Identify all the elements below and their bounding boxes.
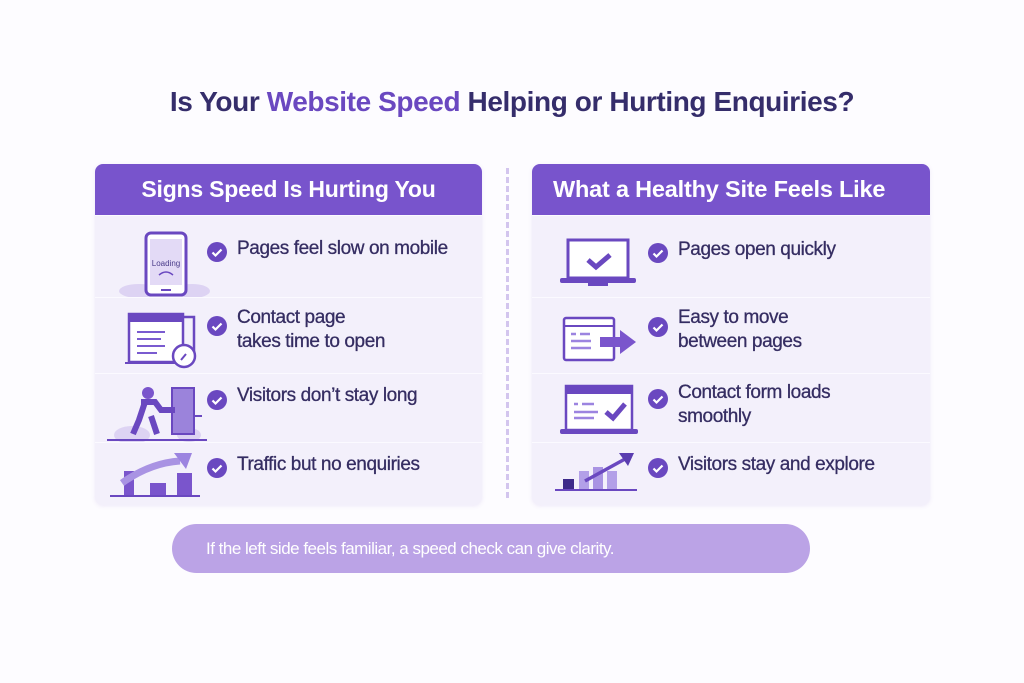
text: takes time to open <box>237 331 385 352</box>
row: easy to move <box>532 297 930 373</box>
row: contact page slow <box>95 297 482 373</box>
icon: phone loading: Loading <box>152 259 180 268</box>
check icon <box>207 316 227 336</box>
row: traffic no enquiries <box>95 442 482 505</box>
check icon <box>207 242 227 262</box>
icon: phone loading <box>119 232 210 297</box>
text <box>237 307 385 352</box>
divider <box>506 168 509 498</box>
icon: laptop check <box>560 238 636 286</box>
check icon <box>648 458 668 478</box>
row: visitors stay <box>532 442 930 505</box>
check icon <box>648 243 668 263</box>
text: Traffic but no enquiries <box>237 454 420 475</box>
icon: person leaving door <box>107 387 207 442</box>
text: Pages open quickly <box>678 239 836 260</box>
text: Easy to move <box>678 307 788 328</box>
heading: right panel <box>532 164 930 215</box>
panel: healthy site <box>532 164 930 505</box>
heading: left panel <box>95 164 482 215</box>
title: Is Your Website Speed Helping or Hurting Enquiries? <box>170 86 854 117</box>
check icon <box>207 390 227 410</box>
row: pages open quickly <box>532 215 930 297</box>
row: slow on mobile <box>95 215 482 297</box>
text: Visitors don’t stay long <box>237 385 417 406</box>
check icon <box>648 389 668 409</box>
icon: laptop form check <box>560 384 638 434</box>
row: contact form <box>532 373 930 442</box>
check icon <box>648 317 668 337</box>
text <box>678 382 830 427</box>
text: Contact page <box>237 307 345 328</box>
icon: rising bar chart <box>555 453 637 491</box>
icon: bar chart arrow <box>110 453 200 497</box>
panel: signs speed is hurting you <box>95 164 482 505</box>
text: Visitors stay and explore <box>678 454 875 475</box>
text: Contact form loads <box>678 382 830 403</box>
text <box>678 307 802 352</box>
text: Pages feel slow on mobile <box>237 238 448 259</box>
icon: browser with clock <box>125 312 196 368</box>
callout: bottom pill: If the left side feels familiar, a speed check can give clarity. <box>206 539 614 558</box>
icon: page with arrow <box>562 316 636 362</box>
callout: bottom pill <box>172 524 810 573</box>
row: visitors don't stay <box>95 373 482 442</box>
heading: right panel: What a Healthy Site Feels Like <box>553 176 885 202</box>
text: between pages <box>678 331 802 352</box>
heading: left panel: Signs Speed Is Hurting You <box>141 176 436 202</box>
text: smoothly <box>678 406 751 427</box>
check icon <box>207 458 227 478</box>
